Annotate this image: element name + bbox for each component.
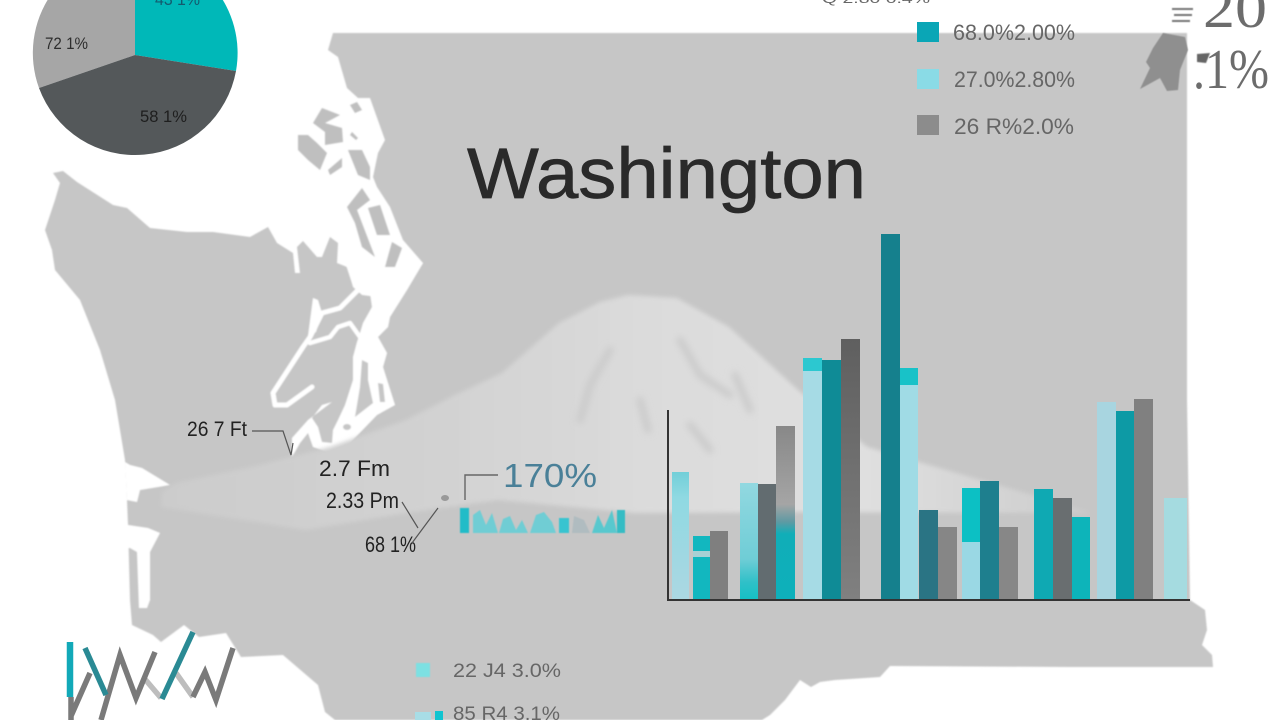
pie label gray: 72 1%: [45, 34, 88, 53]
group 7 bars: [1097, 399, 1187, 600]
legend item: light teal: 22 J4 3.0%: [453, 661, 561, 682]
legend item gray: 26 R%2.0%: [954, 114, 1074, 139]
Puget Sound water: [273, 262, 423, 457]
label 267 with leader: [187, 418, 293, 455]
title: Washington: [467, 135, 866, 214]
pie segment: dark gray: [39, 55, 236, 155]
pie chart: [33, 0, 238, 155]
group 6 bars: [1034, 489, 1090, 600]
San Juan and Whidbey islands: [298, 102, 402, 267]
stat percent: .1%: [1193, 39, 1269, 101]
group 3 bars: [803, 339, 860, 600]
light gray series: [144, 673, 193, 698]
label 68 with leaders: [365, 502, 438, 557]
pie segment: teal: [135, 0, 238, 71]
label 68 with leaders: 68 1%: [365, 532, 416, 557]
legend item: teal: [415, 704, 560, 720]
mountain illustration: [161, 295, 1091, 530]
icon: tree figure: [1140, 8, 1210, 91]
line chart: [70, 632, 233, 720]
legend item teal: 68.0%2.00%: [953, 20, 1075, 45]
callout: elevation labels: [187, 418, 449, 557]
label 2.7: 2.7 Fm: [319, 456, 390, 481]
bracket: [465, 475, 498, 500]
group 1 bars: [672, 472, 728, 600]
legend top: [917, 20, 1075, 139]
group 2 bars: [740, 426, 795, 600]
group 5 bars: [962, 481, 1018, 600]
legend item: light teal: [416, 661, 561, 682]
callout: 170 percent: [460, 457, 625, 533]
Grays Harbor: [125, 462, 170, 502]
teal vertical: [67, 642, 73, 697]
gray series: [71, 648, 233, 720]
big stat: [1193, 0, 1269, 101]
label 2.33: 2.33 Pm: [326, 488, 399, 513]
legend bottom: [415, 661, 561, 720]
pie label dark: 58 1%: [140, 107, 187, 126]
legend item light: 27.0%2.80%: [954, 67, 1075, 92]
mini bar strip: [460, 508, 625, 533]
mountain snow shading: [580, 340, 750, 450]
Willapa Bay: [120, 520, 160, 608]
pie segment: light gray: [33, 0, 135, 88]
dark teal series: [85, 632, 193, 699]
percent value: 170%: [503, 457, 597, 494]
group 4 bars: [881, 234, 957, 600]
bar chart: [668, 234, 1190, 600]
southern Sound islands: [343, 360, 385, 430]
chart axes: [668, 410, 1190, 600]
label 267 with leader: 26 7 Ft: [187, 418, 247, 441]
marker dot: [441, 495, 449, 501]
